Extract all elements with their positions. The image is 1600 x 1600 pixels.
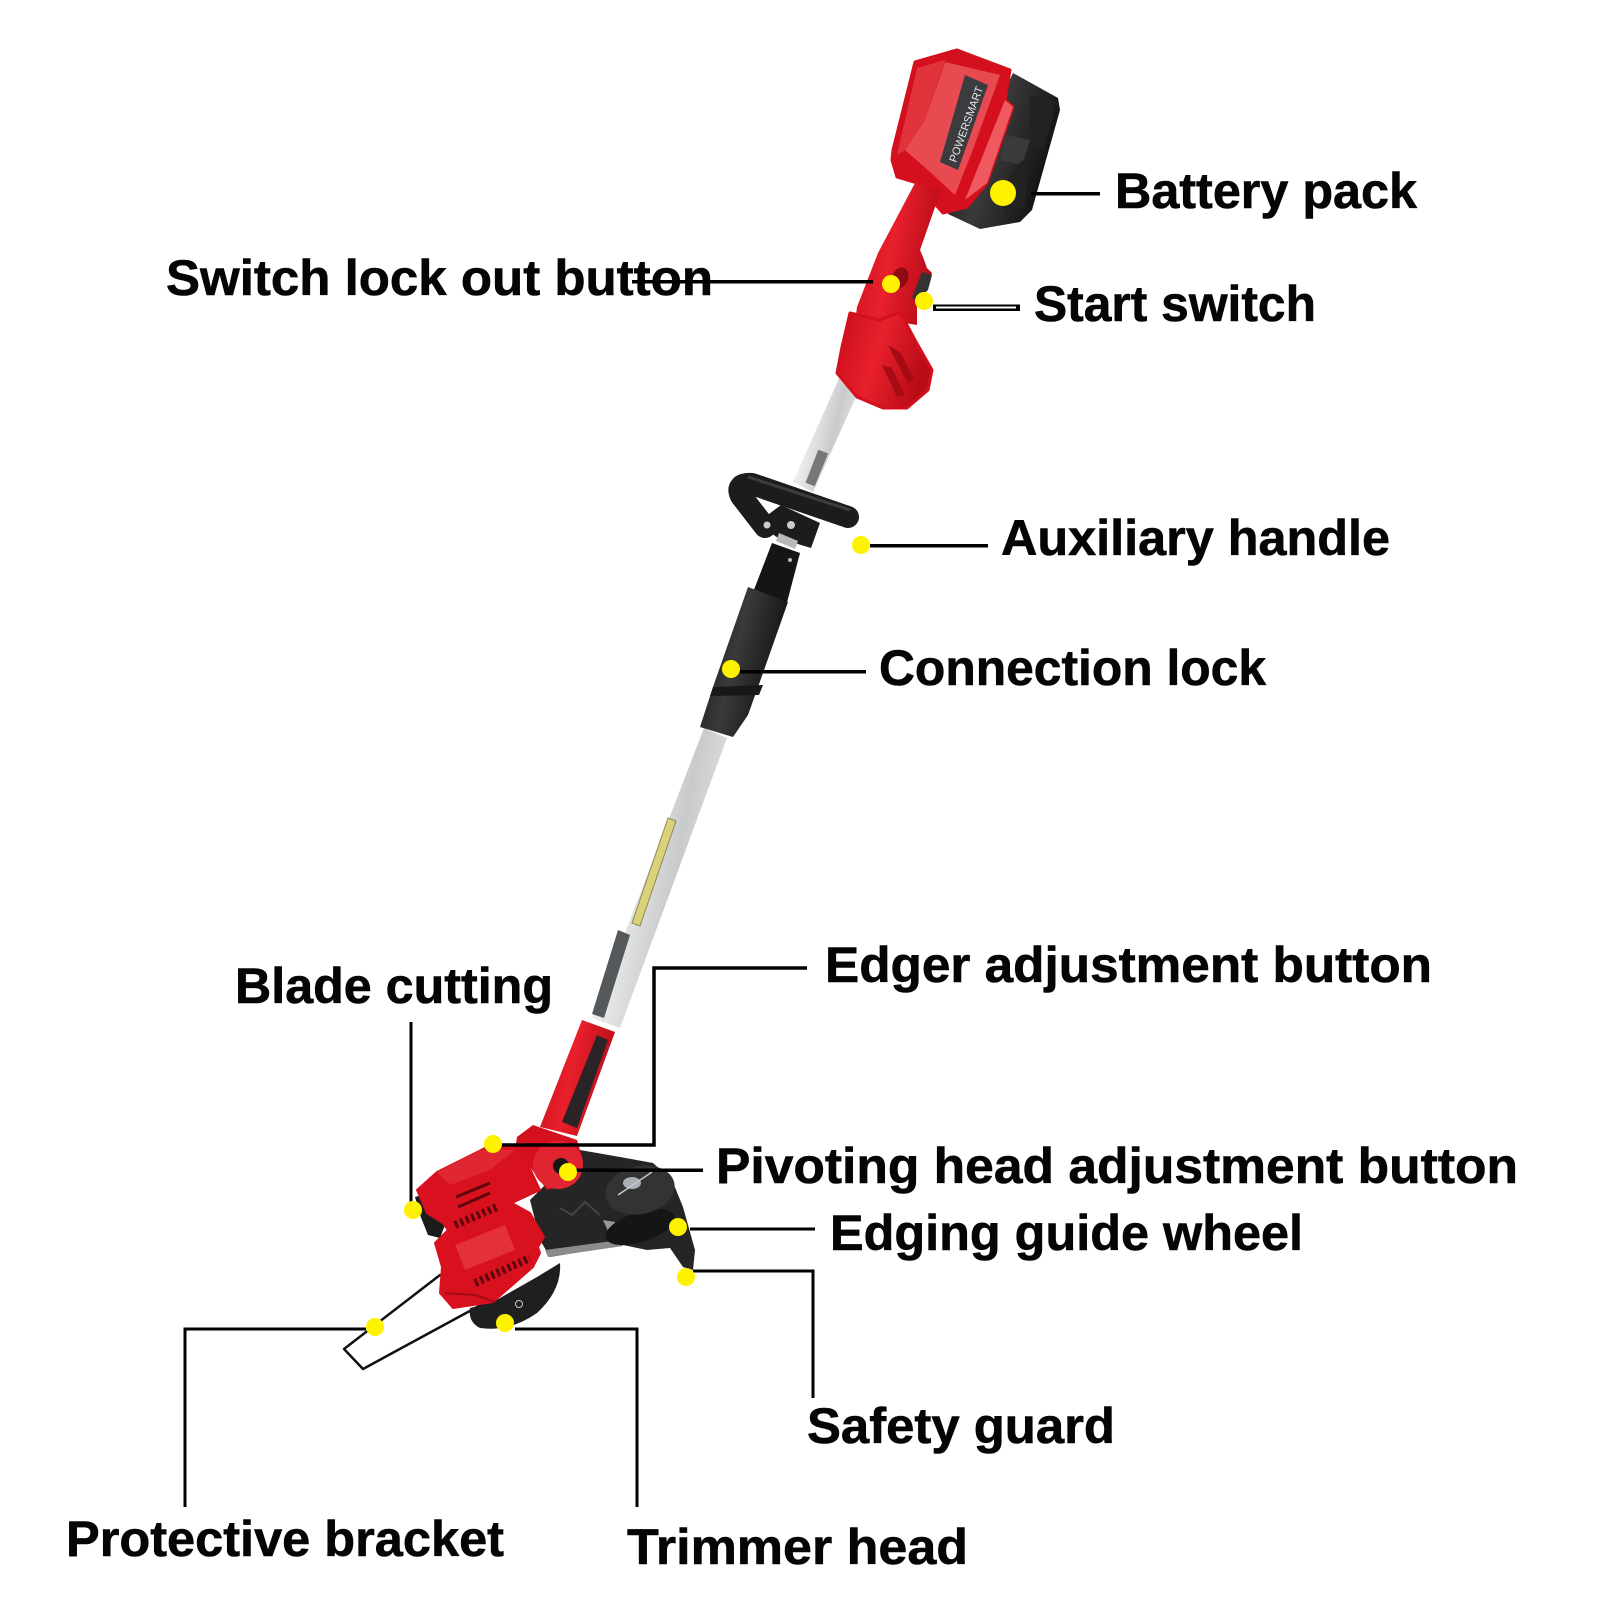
- callout: auxiliary handle: Auxiliary handle: [1001, 510, 1390, 566]
- callout: switch lock out button: Switch lock out button: [166, 250, 713, 306]
- red shaft sleeve: [540, 1020, 615, 1136]
- callout: connection lock: Connection lock: [879, 640, 1266, 696]
- pivot joint: [515, 1125, 583, 1190]
- callout: protective bracket: [66, 1318, 504, 1567]
- callout: trimmer head: [496, 1314, 968, 1575]
- red motor housing: [415, 1147, 544, 1308]
- callout: safety guard: [677, 1268, 1115, 1454]
- start switch trigger: [912, 272, 932, 300]
- brand plate: POWERSMART: [948, 85, 986, 164]
- callout: edger adjustment button: Edger adjustment button: [825, 937, 1432, 993]
- dark grip stripe on shaft: [592, 930, 630, 1018]
- red battery housing: [892, 50, 1013, 213]
- trimmer product illustration: [344, 50, 1060, 1369]
- callout: protective bracket: Protective bracket: [66, 1511, 504, 1567]
- protective bracket outline: [344, 1275, 490, 1369]
- callout: battery pack: Battery pack: [1115, 163, 1417, 219]
- callout: blade cutting: Blade cutting: [235, 958, 553, 1014]
- callout: edger adjustment button: [484, 937, 1432, 1153]
- upper aluminium shaft: [793, 376, 860, 492]
- lockout button recess: [888, 265, 912, 291]
- spool under head: [470, 1263, 560, 1329]
- lower aluminium shaft: [592, 728, 727, 1028]
- callout: start switch: Start switch: [1034, 276, 1316, 332]
- callout: blade cutting: [235, 958, 553, 1219]
- barcode sticker: [805, 449, 829, 487]
- housing vents: [455, 1183, 530, 1283]
- auxiliary D-handle: [739, 477, 850, 549]
- brand plate: [940, 75, 988, 170]
- callout: pivoting head adjustment button: Pivoting head adjustment button: [716, 1138, 1518, 1194]
- callout: safety guard: Safety guard: [807, 1398, 1115, 1454]
- guard plate and wheel: [530, 1150, 695, 1270]
- red grip end: [837, 312, 932, 408]
- callout: trimmer head: Trimmer head: [627, 1519, 968, 1575]
- battery pack: [948, 73, 1060, 229]
- yellow warning label on shaft: [632, 818, 676, 926]
- red handle tube and start switch housing: [856, 183, 941, 325]
- connection lock sleeve: [700, 543, 800, 737]
- callout: edging guide wheel: Edging guide wheel: [830, 1205, 1303, 1261]
